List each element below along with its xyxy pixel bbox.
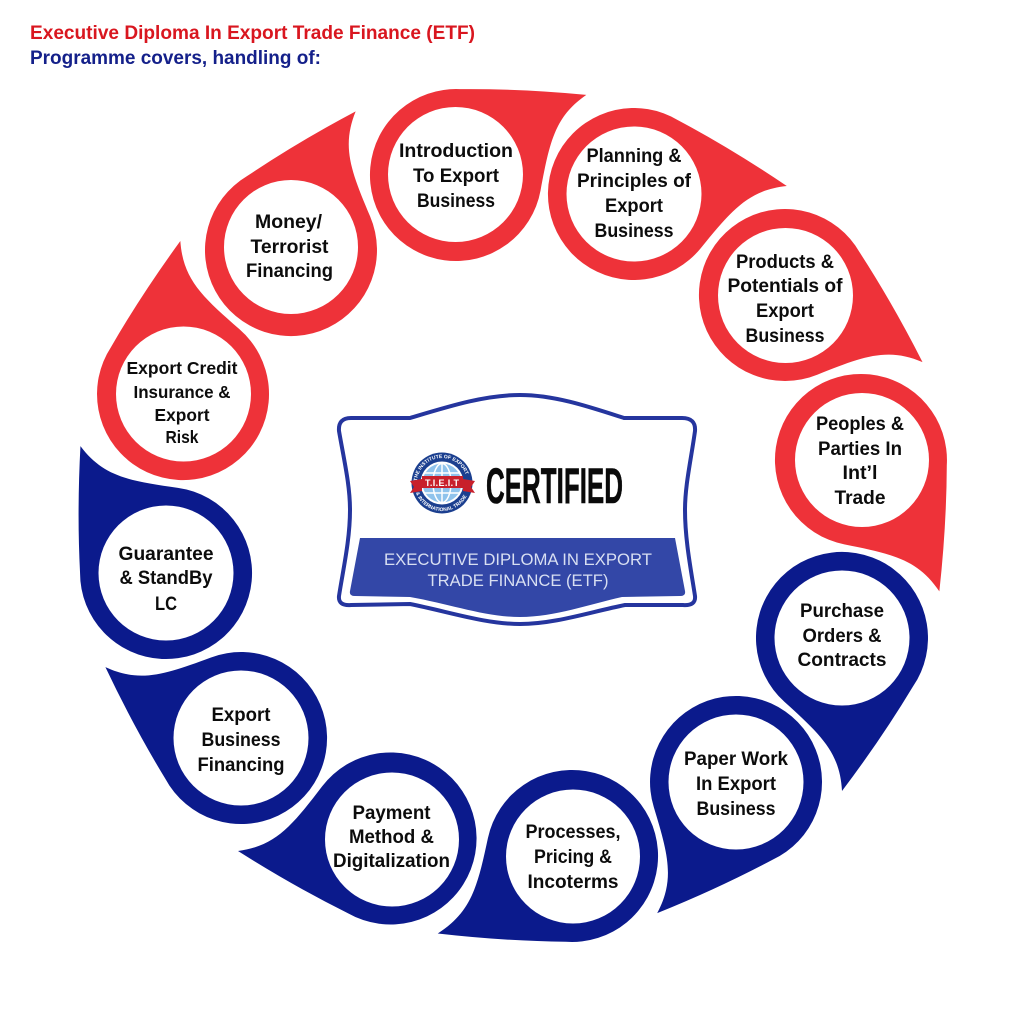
step: Peoples & Parties In Int'l Trade: Int’l	[842, 463, 878, 484]
title: Executive Diploma In Export Trade Finance (ETF)	[30, 23, 475, 44]
step: Paper Work In Export Business	[583, 664, 854, 957]
CERTIFIED wordmark: CERTIFIED	[486, 458, 623, 514]
step: Export Business Financing	[66, 591, 357, 854]
step: Export Credit Insurance & Export Risk	[94, 240, 271, 482]
step: Export Business Financing: Financing	[198, 755, 284, 776]
step: Peoples & Parties In Int'l Trade: Trade	[834, 488, 886, 509]
step: Planning & Principles of Export Business: Principles of	[577, 171, 692, 192]
step: Payment Method & Digitalization: Method &	[349, 827, 434, 848]
step: Payment Method & Digitalization: Digitalization	[333, 851, 450, 872]
step: Products & Potentials of Export Business: Business	[746, 326, 824, 347]
step: Guarantee & StandBy LC: Guarantee	[118, 544, 214, 565]
step: Export Credit Insurance & Export Risk: Export Credit	[126, 358, 238, 378]
certificate badge: TRADE FINANCE (ETF)	[428, 572, 608, 590]
step: Introduction To Export Business: Introduction	[399, 141, 513, 162]
step: Planning & Principles of Export Business: Planning &	[586, 146, 682, 167]
step: Export Credit Insurance & Export Risk: Risk	[166, 427, 199, 447]
step: Products & Potentials of Export Business	[670, 180, 960, 439]
step: Planning & Principles of Export Business	[544, 100, 791, 284]
step: Paper Work In Export Business: In Export	[696, 774, 777, 795]
step: Peoples & Parties In Int'l Trade	[743, 342, 1013, 635]
step: Guarantee & StandBy LC: & StandBy	[120, 568, 213, 589]
step: Export Credit Insurance & Export Risk: Export	[154, 405, 210, 425]
logo: T.I.E.I.T globe seal: T.I.E.I.T	[425, 478, 460, 488]
logo: T.I.E.I.T globe seal: & INTERNATIONAL TRADE	[416, 492, 467, 512]
step: Products & Potentials of Export Business: Export	[756, 301, 815, 322]
title	[30, 23, 475, 69]
step: Paper Work In Export Business: Business	[696, 799, 776, 820]
badge blue banner	[350, 538, 685, 617]
step: Guarantee & StandBy LC: LC	[155, 594, 177, 615]
logo: T.I.E.I.T globe seal: THE INSTITUTE OF EXPORT	[414, 454, 469, 480]
step: Planning & Principles of Export Business: Export	[605, 196, 664, 217]
logo: T.I.E.I.T globe seal	[410, 452, 475, 514]
title: Programme covers, handling of:	[30, 48, 321, 69]
step: Processes, Pricing & Incoterms: Incoterms	[528, 872, 618, 893]
step: Money/Terrorist Financing: Financing	[246, 261, 333, 282]
banner text: EXECUTIVE DIPLOMA IN EXPORT	[384, 551, 652, 569]
step: Processes, Pricing & Incoterms	[395, 738, 690, 1008]
step: Introduction To Export Business: Business	[417, 191, 495, 212]
step: Products & Potentials of Export Business: Potentials of	[728, 276, 843, 297]
step: Processes, Pricing & Incoterms: Processes,	[526, 822, 620, 843]
step: Products & Potentials of Export Business: Products &	[736, 252, 834, 273]
step: Purchase Orders & Contracts: Contracts	[798, 650, 886, 671]
badge outline	[339, 395, 695, 624]
step: Introduction To Export Business: To Export	[413, 166, 500, 187]
step: Money/Terrorist Financing	[177, 75, 434, 364]
step: Processes, Pricing & Incoterms: Pricing &	[534, 847, 612, 868]
step: Export Business Financing: Business	[202, 730, 280, 751]
step: Money/Terrorist Financing: Terrorist	[250, 237, 329, 258]
step: Guarantee & StandBy LC	[9, 398, 285, 692]
step: Money/Terrorist Financing: Money/	[255, 212, 323, 233]
step: Export Credit Insurance & Export Risk: Insurance &	[134, 382, 231, 402]
step: Payment Method & Digitalization	[231, 746, 483, 937]
step: Purchase Orders & Contracts: Purchase	[800, 601, 884, 622]
step: Purchase Orders & Contracts	[756, 552, 928, 791]
step: Payment Method & Digitalization: Payment	[352, 803, 431, 824]
certificate badge	[336, 393, 698, 626]
step: Paper Work In Export Business: Paper Work	[684, 749, 788, 770]
step: Peoples & Parties In Int'l Trade: Parties In	[818, 439, 902, 460]
step: Export Business Financing: Export	[212, 705, 271, 726]
step: Peoples & Parties In Int'l Trade: Peoples &	[816, 414, 904, 435]
step: Purchase Orders & Contracts: Orders &	[802, 626, 882, 647]
step: Introduction To Export Business	[338, 22, 631, 293]
step: Planning & Principles of Export Business: Business	[594, 221, 674, 242]
